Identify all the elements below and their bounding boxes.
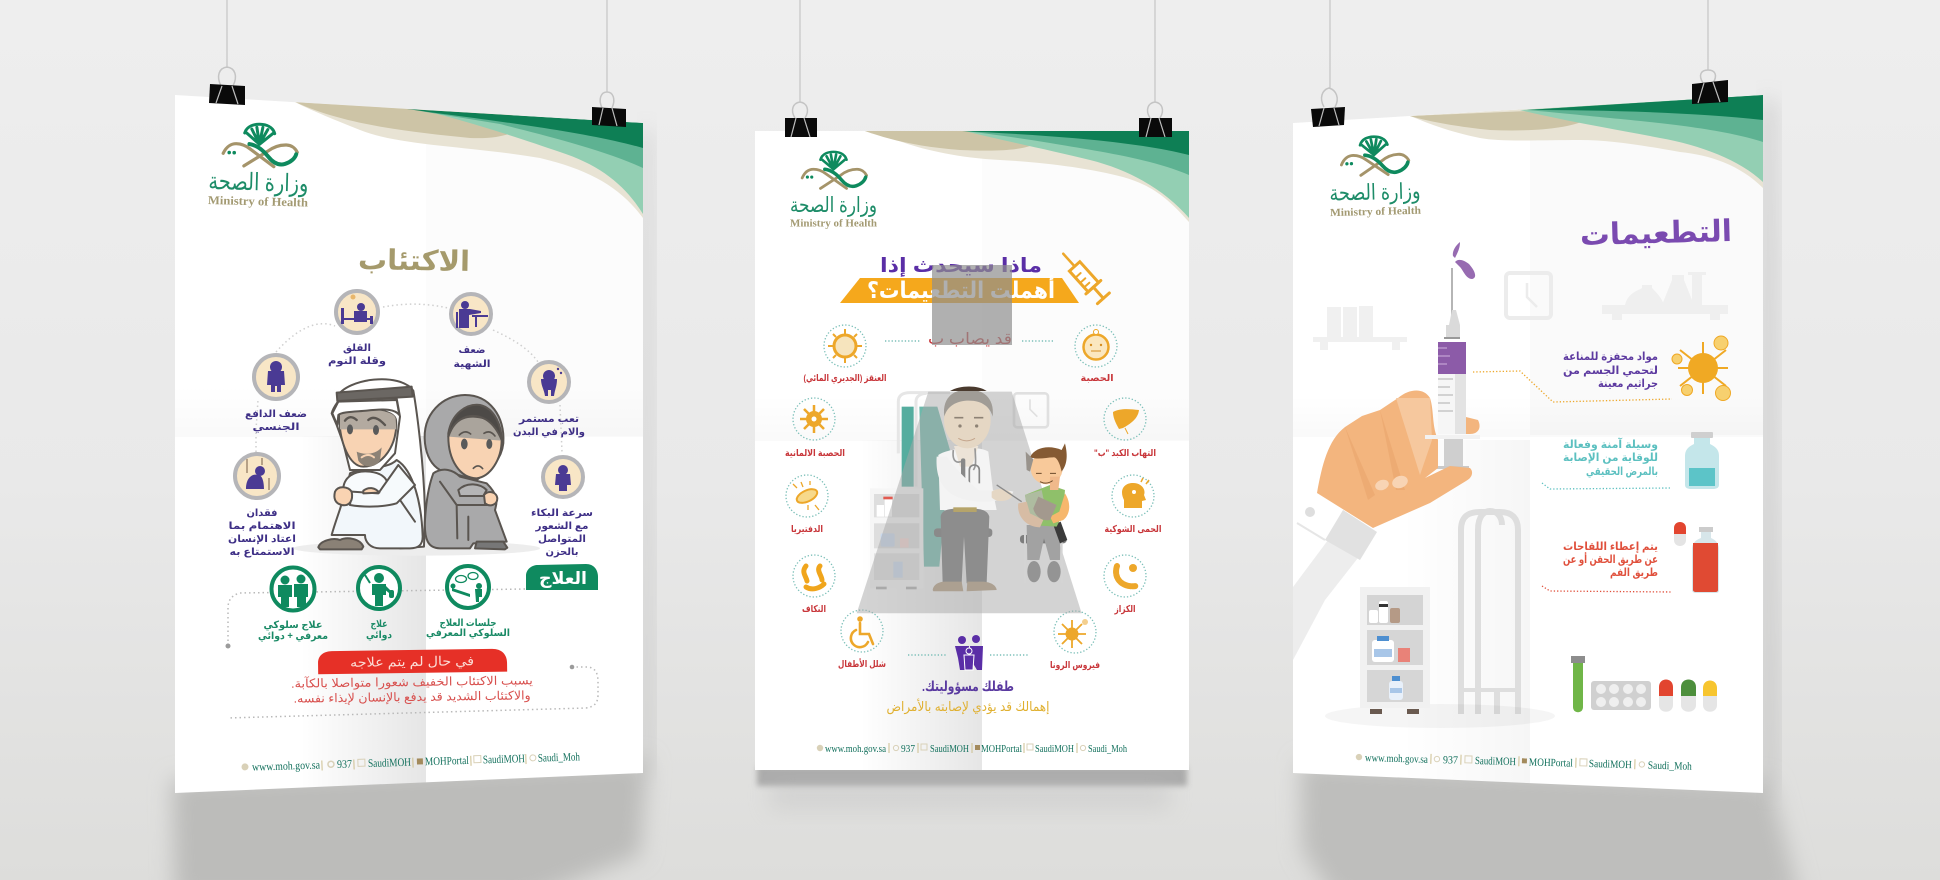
poster 2 sheet bbox=[755, 131, 1189, 770]
poster 1 footer: 937 bbox=[337, 759, 352, 771]
dotted connector red bbox=[1542, 586, 1672, 592]
poster 1 sheet bbox=[175, 95, 643, 793]
logo swords bbox=[1341, 154, 1409, 176]
warning consequences text: والاكتئاب الشديد قد يدفع بالإنسان لإيذاء نفسه. bbox=[294, 688, 531, 707]
disease: mumps bbox=[793, 555, 835, 615]
treatment label bbox=[426, 618, 510, 639]
symptom: low libido bbox=[254, 355, 298, 399]
faint lab shelf bbox=[1602, 272, 1728, 320]
medicine cabinet bbox=[870, 488, 923, 589]
logo english name: Ministry of Health bbox=[208, 193, 308, 210]
symptom label bbox=[454, 345, 490, 370]
symptom label: الشهية bbox=[454, 359, 490, 370]
poster 2 footer: 937 bbox=[901, 744, 915, 755]
clip: poster 1 left bbox=[209, 67, 245, 105]
warning consequences text: يسبب الاكتئاب الخفيف شعورا متواصلا بالكآبة. bbox=[291, 672, 533, 692]
logo english name: Ministry of Health bbox=[790, 219, 877, 230]
poster 2 ribbon bbox=[865, 131, 1189, 222]
symptom label bbox=[228, 508, 296, 558]
symptom label: مع الشعور bbox=[534, 521, 588, 532]
symptom label: القلق bbox=[343, 343, 371, 354]
binder clips bbox=[209, 67, 1728, 137]
poster 2 footer: SaudiMOH bbox=[930, 744, 969, 755]
grey overlay trapezoid bbox=[857, 392, 1082, 613]
warning consequences text bbox=[291, 672, 533, 707]
disease: hepatitis B: التهاب الكبد "ب" bbox=[1094, 448, 1156, 459]
poster shadows bbox=[172, 100, 1800, 880]
icon: capsules bbox=[1659, 680, 1717, 712]
disease: diphtheria bbox=[786, 475, 828, 535]
logo palm bbox=[1360, 136, 1388, 155]
poster 3 sheet bbox=[1293, 95, 1763, 793]
poster 2 footer: MOHPortal bbox=[981, 744, 1022, 755]
symptom label: والام في البدن bbox=[513, 427, 585, 438]
treatment: CBT sessions icon bbox=[447, 566, 489, 608]
stand with screen bbox=[1461, 511, 1518, 714]
poster 3 footer: MOHPortal bbox=[1529, 756, 1573, 770]
disease: polio: شلل الأطفال bbox=[838, 658, 886, 670]
syringe bbox=[1435, 242, 1475, 469]
logo swords bbox=[223, 143, 297, 167]
treatment label: معرفي + دوائي bbox=[258, 631, 328, 642]
icon: family bbox=[955, 635, 983, 670]
treatment dotted connector bbox=[228, 589, 525, 644]
poster 2 footer bbox=[817, 743, 1128, 755]
clip: poster 3 right bbox=[1692, 70, 1728, 104]
symptom: loss of appetite bbox=[451, 294, 491, 334]
symptom label bbox=[245, 409, 307, 433]
poster 1 ribbon bbox=[295, 102, 643, 218]
treatment label: علاج سلوكي bbox=[264, 620, 322, 631]
poster 2 logo bbox=[790, 152, 877, 230]
warning bar bbox=[318, 649, 507, 674]
symptom label: وقلة النوم bbox=[328, 356, 386, 367]
logo palm bbox=[244, 124, 275, 145]
illustration: sad man and woman bbox=[293, 379, 540, 556]
doctor bbox=[933, 386, 1022, 591]
medicine cabinet bbox=[1360, 587, 1430, 714]
treatment label bbox=[258, 620, 328, 642]
poster 3: vaccinations bbox=[1293, 95, 1763, 793]
logo arabic name: وزارة الصحة bbox=[1329, 178, 1421, 206]
icon: teal vial bbox=[1685, 432, 1719, 489]
poster 2: vaccination neglect bbox=[755, 131, 1189, 770]
icon: virus bbox=[1672, 336, 1730, 400]
doctor arm sleeve bbox=[1293, 507, 1377, 660]
text: given by injection or mouth bbox=[1563, 541, 1658, 579]
disease: meningitis bbox=[1104, 475, 1162, 535]
symptom label: فقدان bbox=[246, 508, 278, 519]
faint wall shelf with books bbox=[1313, 306, 1407, 350]
subheading: may be infected with: قد يصاب ب bbox=[928, 331, 1012, 348]
poster 3 footer: Saudi_Moh bbox=[1648, 760, 1692, 773]
curtain and frame bbox=[898, 393, 950, 567]
text: given by injection or mouth: يتم إعطاء اللقاحات bbox=[1563, 541, 1658, 553]
clip: poster 2 left bbox=[785, 102, 817, 137]
symptom label: الاستمتاع به bbox=[230, 547, 294, 558]
illustration: doctor vaccinating boy bbox=[857, 386, 1082, 613]
subheading dotted lines bbox=[885, 340, 1055, 342]
poster 2 heading banner: أهملت التطعيمات؟ bbox=[867, 274, 1055, 303]
treatment label: علاج bbox=[370, 619, 388, 630]
dotted connector teal bbox=[1542, 483, 1672, 489]
treatment label: دوائي bbox=[366, 630, 392, 641]
poster 1 title: الاكتئاب bbox=[358, 244, 470, 277]
poster 3 footer: 937 bbox=[1443, 754, 1459, 767]
logo english name: Ministry of Health bbox=[1330, 205, 1421, 219]
disease: mumps: النكاف bbox=[802, 604, 826, 615]
poster 1 logo bbox=[208, 123, 310, 210]
poster 3 logo bbox=[1328, 136, 1421, 219]
symptom label: الجنسي bbox=[252, 422, 300, 433]
poster 1 footer: www.moh.gov.sa bbox=[252, 760, 320, 774]
symptom label: بالحزن bbox=[546, 547, 578, 558]
connector end dot bbox=[226, 644, 230, 648]
text: given by injection or mouth: طريق الفم bbox=[1610, 567, 1658, 579]
symptom: quick crying bbox=[543, 457, 583, 497]
icon: test tube bbox=[1571, 656, 1585, 712]
symptom label: تعب مستمر bbox=[518, 414, 579, 425]
family dotted lines bbox=[908, 654, 1028, 656]
poster 2 footer: Saudi_Moh bbox=[1088, 744, 1128, 755]
disease: hepatitis B bbox=[1094, 398, 1156, 459]
poster 3 footer: SaudiMOH bbox=[1475, 755, 1516, 768]
disease: german measles: الحصبة الالمانية bbox=[785, 448, 845, 459]
closing message yellow: إهمالك قد يؤدي لإصابته بالأمراض bbox=[886, 698, 1050, 715]
icon: capsule and red bottle bbox=[1674, 522, 1719, 593]
poster 3 title: التطعيمات bbox=[1580, 215, 1732, 252]
treatment tab bbox=[526, 564, 598, 590]
treatment label: السلوكي المعرفي bbox=[426, 628, 510, 639]
symptom label: اعتاد الإنسان bbox=[228, 534, 296, 545]
disease: german measles bbox=[785, 398, 845, 459]
symptom label: الاهتمام بما bbox=[228, 521, 296, 532]
disease: tetanus: الكزاز bbox=[1114, 604, 1136, 615]
symptom label bbox=[531, 508, 593, 558]
symptom: anxiety and insomnia bbox=[336, 291, 378, 333]
poster 3 footer: SaudiMOH bbox=[1589, 758, 1632, 771]
symptom: loss of interest bbox=[235, 454, 279, 498]
text: stimulates immunity: لتحمي الجسم من bbox=[1563, 365, 1658, 377]
poster 3 footer bbox=[1356, 752, 1692, 773]
poster 1 footer bbox=[241, 751, 580, 774]
icon: blister pack bbox=[1591, 681, 1651, 710]
poster 1 footer: Saudi_Moh bbox=[538, 751, 580, 765]
warning bar: في حال لم يتم علاجه bbox=[350, 653, 474, 671]
hand holding syringe bbox=[1317, 390, 1480, 528]
logo palm bbox=[820, 152, 847, 169]
text: safe and effective bbox=[1563, 437, 1658, 478]
disease: polio bbox=[838, 610, 886, 670]
poster 1 footer: SaudiMOH bbox=[483, 753, 525, 766]
text: safe and effective: للوقاية من الإصابة bbox=[1563, 452, 1658, 464]
clip: poster 1 right bbox=[592, 92, 626, 127]
poster 3 ribbon bbox=[1410, 95, 1763, 188]
symptoms dotted arc bbox=[256, 304, 562, 452]
poster 2 footer: SaudiMOH bbox=[1035, 744, 1074, 755]
symptom label: سرعة البكاء bbox=[531, 508, 593, 519]
disease: diphtheria: الدفتيريا bbox=[791, 524, 823, 535]
treatment: medication icon bbox=[358, 567, 400, 609]
poster 3 fold shading bbox=[1293, 100, 1763, 790]
treatment: behavioural and medication icon bbox=[272, 568, 314, 610]
faint wall clock bbox=[1506, 273, 1551, 318]
treatment label: جلسات العلاج bbox=[440, 618, 496, 629]
symptom label: المتواصل bbox=[538, 534, 586, 545]
boy bbox=[1018, 443, 1069, 583]
logo arabic name: وزارة الصحة bbox=[208, 168, 309, 198]
dotted connector orange bbox=[1473, 371, 1672, 402]
text: safe and effective: وسيلة آمنة وفعالة bbox=[1563, 437, 1658, 451]
poster 2 fold shading bbox=[755, 131, 1189, 770]
treatment label bbox=[366, 619, 392, 641]
closing message purple: طفلك مسؤوليتك. bbox=[922, 678, 1014, 695]
disease: measles: الحصبة bbox=[1080, 373, 1114, 384]
grey overlay block bbox=[932, 265, 1012, 345]
symptom label bbox=[328, 343, 386, 367]
poster 3 footer: www.moh.gov.sa bbox=[1365, 752, 1428, 766]
warning outline dot bbox=[570, 665, 574, 669]
poster 1: depression bbox=[175, 95, 643, 796]
poster 2 footer: www.moh.gov.sa bbox=[825, 744, 886, 755]
disease: meningitis: الحمى الشوكية bbox=[1104, 524, 1162, 535]
icon: syringe bbox=[1056, 247, 1111, 305]
logo swords bbox=[802, 169, 867, 188]
floor ellipse bbox=[1325, 704, 1555, 728]
poster 1 footer: MOHPortal bbox=[425, 755, 469, 768]
disease: measles bbox=[1075, 325, 1117, 384]
clip: poster 2 right bbox=[1139, 102, 1172, 137]
clock bbox=[1014, 393, 1048, 427]
disease: corona virus: فيروس الرونا bbox=[1050, 660, 1100, 671]
poster 1 footer: SaudiMOH bbox=[368, 757, 411, 770]
symptom label: ضعف الدافع bbox=[245, 409, 307, 420]
disease: chickenpox bbox=[804, 325, 886, 384]
clip: poster 3 left bbox=[1311, 88, 1345, 127]
symptom label: ضعف bbox=[458, 345, 486, 356]
disease: tetanus bbox=[1104, 555, 1146, 615]
hanging strings bbox=[227, 0, 1708, 102]
treatment tab: العلاج bbox=[539, 569, 587, 589]
text: safe and effective: بالمرض الحقيقي bbox=[1586, 466, 1658, 478]
poster 2 heading line 1: ماذا سيحدث إذا bbox=[880, 255, 1042, 277]
symptom: constant fatigue bbox=[529, 362, 569, 402]
warning dotted outline bbox=[228, 667, 598, 718]
text: stimulates immunity: مواد محفزة للمناعة bbox=[1563, 351, 1658, 363]
text: given by injection or mouth: عن طريق الحقن أو عن bbox=[1563, 552, 1658, 566]
text: stimulates immunity: جراثيم معينة bbox=[1598, 378, 1658, 390]
disease: chickenpox: العنقز (الجديري المائي) bbox=[804, 373, 886, 384]
poster 1 fold shading bbox=[233, 104, 640, 786]
symptom label bbox=[513, 414, 585, 438]
text: stimulates immunity bbox=[1563, 351, 1658, 390]
disease: corona virus bbox=[1050, 611, 1100, 671]
logo arabic name: وزارة الصحة bbox=[790, 194, 877, 217]
